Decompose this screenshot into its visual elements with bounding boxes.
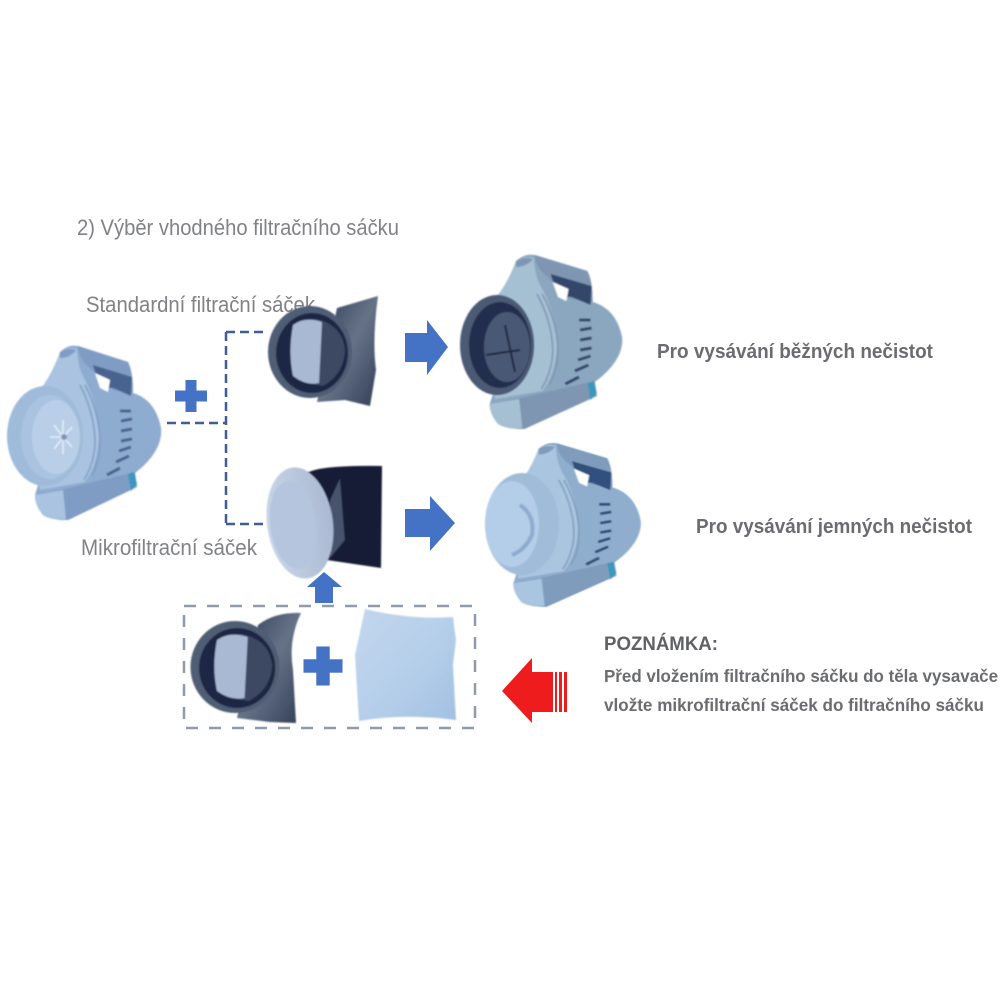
note line 2: vložte mikrofiltrační sáček do filtračního sáčku — [604, 695, 984, 715]
arrow: right, top — [405, 320, 448, 375]
intake ring — [7, 386, 83, 486]
note — [604, 633, 998, 715]
title: 2) Výběr vhodného filtračního sáčku — [77, 215, 399, 240]
arrow: right, bottom — [405, 496, 455, 551]
note line 1: Před vložením filtračního sáčku do těla vysavače — [604, 666, 998, 686]
vacuum body: base unit — [7, 346, 161, 520]
note heading: POZNÁMKA: — [604, 633, 718, 655]
result label: common dirt: Pro vysávání běžných nečistot — [657, 341, 933, 363]
arrow: up — [307, 572, 342, 603]
result label: fine dirt: Pro vysávání jemných nečistot — [696, 516, 972, 538]
plus sign — [303, 646, 343, 686]
plus sign — [175, 380, 207, 412]
red arrow — [502, 658, 567, 723]
filter bag — [190, 613, 301, 723]
micro filter bag — [260, 463, 382, 583]
dashed assembly box — [184, 606, 475, 728]
vacuum with micro bag — [485, 443, 641, 607]
label: standard filter bag: Standardní filtrační sáček — [86, 292, 316, 317]
vacuum with standard bag — [460, 255, 622, 429]
standard filter bag — [268, 296, 378, 406]
dashed connector — [167, 332, 267, 524]
micro filter cloth — [355, 609, 456, 721]
dark bag ring — [460, 295, 534, 395]
white bag ring — [485, 473, 559, 575]
label: micro filter bag: Mikrofiltrační sáček — [81, 535, 258, 560]
